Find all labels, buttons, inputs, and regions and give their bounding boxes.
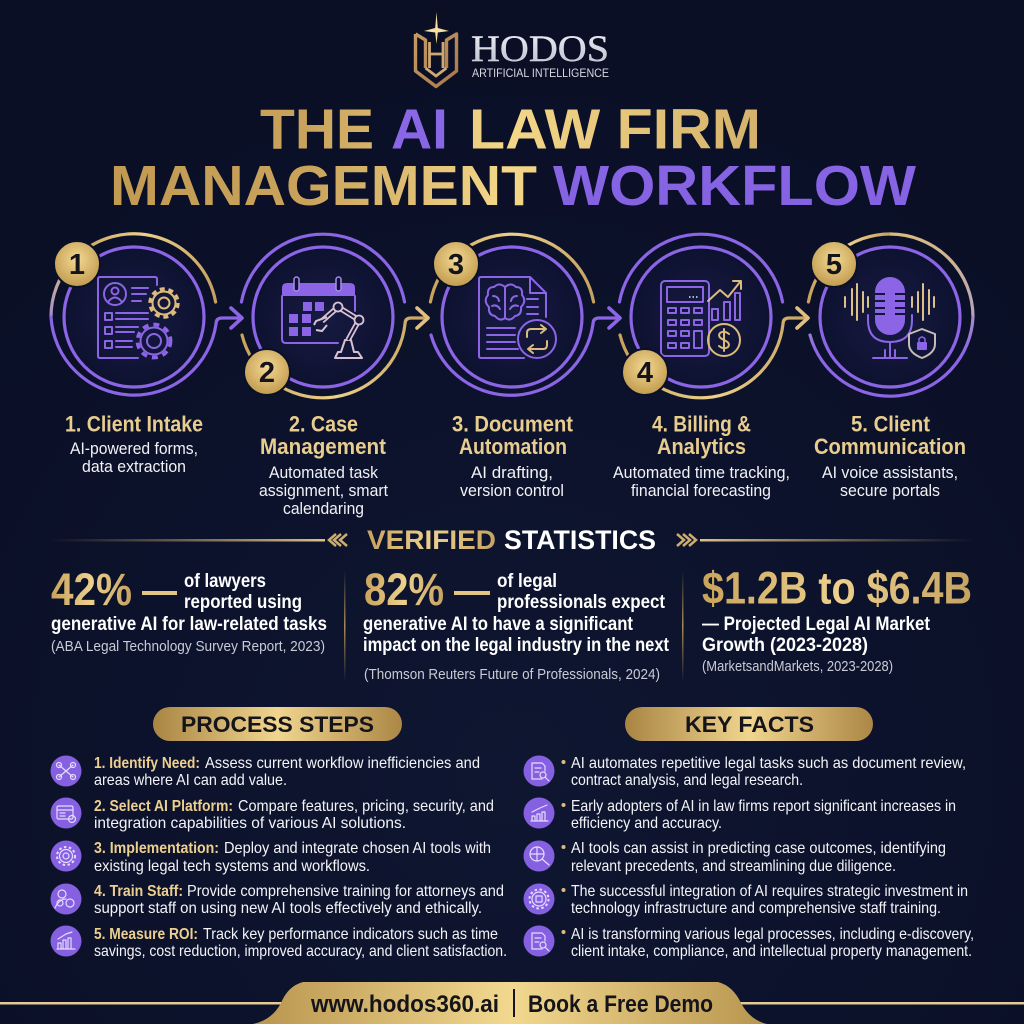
step 1: client intake — [51, 234, 242, 476]
step 3 text: 3. Document — [452, 412, 574, 436]
process step 2: Compare features, pricing, security, and — [238, 798, 494, 815]
stat: 42 percent: generative AI for law-related tasks — [51, 613, 327, 635]
key fact 4: The successful integration of AI requires strategic investment in — [571, 883, 968, 900]
stat: 42 percent: reported using — [184, 591, 302, 613]
step 5 text: AI voice assistants, — [822, 464, 958, 482]
icon: calendar with robot arm — [282, 277, 364, 358]
heading pill: key facts: KEY FACTS — [685, 712, 814, 737]
heading: verified statistics: VERIFIED — [367, 525, 496, 555]
stat: 82 percent: professionals expect — [497, 591, 665, 613]
step 2 text: Automated task — [269, 464, 379, 482]
panel: process steps list — [50, 755, 507, 960]
process step 1 — [50, 755, 480, 789]
brand tagline: ARTIFICIAL INTELLIGENCE — [472, 68, 609, 80]
process step 3: 3. Implementation: — [94, 840, 219, 857]
stat: 42 percent: (ABA Legal Technology Survey Report, 2023) — [51, 638, 325, 655]
process step 3: Deploy and integrate chosen AI tools with — [224, 840, 491, 857]
title: MANAGEMENT — [110, 154, 537, 218]
key fact 1: AI automates repetitive legal tasks such as document review, — [571, 755, 966, 772]
badge 5: 5 — [826, 249, 842, 281]
stat: 42 percent: 42% — [51, 564, 132, 615]
icon: shield with star — [416, 12, 456, 86]
key fact 3: AI tools can assist in predicting case outcomes, identifying — [571, 840, 946, 857]
step 3 text — [452, 412, 574, 500]
arrow — [609, 308, 620, 328]
badge 1 — [54, 241, 100, 287]
stat: 82 percent: 82% — [364, 564, 444, 615]
process step 5: savings, cost reduction, improved accuracy, and client satisfaction. — [94, 943, 507, 960]
process step 4: support staff on using new AI tools effectively and ethically. — [94, 900, 482, 917]
stat: 82 percent: of legal — [497, 570, 557, 592]
step 2 text: Management — [260, 434, 387, 459]
heading: verified statistics: STATISTICS — [504, 525, 656, 555]
step 3: document automation — [430, 234, 620, 500]
step 1 text: AI-powered forms, — [70, 440, 198, 458]
key fact 2: Early adopters of AI in law firms report significant increases in — [571, 798, 956, 815]
stat: market growth: $1.2B to $6.4B — [702, 562, 972, 614]
step 5: client communication — [808, 234, 973, 500]
stat: 82 percent: (Thomson Reuters Future of Professionals, 2024) — [364, 666, 660, 683]
process step 3: existing legal tech systems and workflows. — [94, 858, 370, 875]
badge 3: 3 — [448, 249, 464, 281]
step 5 text: 5. Client — [851, 412, 931, 436]
badge 4 — [622, 349, 668, 395]
step 4 text — [613, 412, 790, 500]
logo: Hodos Artificial Intelligence — [416, 12, 609, 86]
step 1 text — [65, 412, 203, 476]
badge 2 — [244, 349, 290, 395]
process step 2: 2. Select AI Platform: — [94, 798, 233, 815]
stat: 42 percent — [51, 564, 327, 655]
stat: market growth: (MarketsandMarkets, 2023-2028) — [702, 658, 893, 675]
heading: verified statistics — [50, 525, 974, 555]
icon: profile form with gears — [98, 277, 178, 358]
key fact 5: client intake, compliance, and intellectual property management. — [571, 943, 972, 960]
process step 2 — [50, 798, 494, 832]
title — [110, 98, 916, 218]
key fact 4: technology infrastructure and comprehensive staff training. — [571, 900, 941, 917]
footer call to action: Book a Free Demo — [528, 991, 713, 1018]
key fact 1 — [524, 755, 966, 789]
step 2 text: assignment, smart — [259, 482, 388, 500]
step 5 text: Communication — [814, 434, 966, 459]
step 2 text: calendaring — [283, 500, 364, 518]
step 4 text: financial forecasting — [631, 482, 771, 500]
step 3 text: Automation — [459, 434, 567, 459]
badge 5 — [811, 241, 857, 287]
step 2 text: 2. Case — [289, 412, 358, 436]
title: AI — [391, 98, 448, 162]
process step 1: areas where AI can add value. — [94, 772, 287, 789]
step 5 text: secure portals — [840, 482, 940, 500]
process step 5 — [50, 926, 507, 960]
title: THE — [260, 98, 374, 162]
process step 5: 5. Measure ROI: — [94, 926, 198, 943]
arrow — [797, 308, 808, 328]
badge 1: 1 — [69, 249, 85, 281]
key fact 2 — [524, 798, 956, 832]
stat: market growth: Growth (2023-2028) — [702, 634, 868, 656]
heading pill: process steps: PROCESS STEPS — [181, 712, 374, 737]
process step 5: Track key performance indicators such as time — [203, 926, 498, 943]
heading pill: process steps — [153, 707, 402, 741]
title: WORKFLOW — [553, 154, 916, 218]
process step 4: 4. Train Staff: — [94, 883, 183, 900]
step 3 text: version control — [460, 482, 564, 500]
heading pill: key facts — [625, 707, 873, 741]
stat: market growth — [702, 562, 972, 675]
step 4 text: Automated time tracking, — [613, 464, 790, 482]
badge 3 — [433, 241, 479, 287]
step 5 text — [814, 412, 966, 500]
icon: microphone with shield — [845, 277, 935, 358]
process step 4: Provide comprehensive training for attorneys and — [187, 883, 504, 900]
step 3 text: AI drafting, — [471, 464, 553, 482]
step 2 text — [259, 412, 388, 518]
step 1 text: data extraction — [82, 458, 186, 476]
process step 1: Assess current workflow inefficiencies and — [205, 755, 480, 772]
key fact 1: contract analysis, and legal research. — [571, 772, 803, 789]
footer banner — [0, 982, 1024, 1024]
stat: 42 percent: of lawyers — [184, 570, 266, 592]
arrow — [417, 308, 428, 328]
icon: calculator, chart and dollar — [661, 281, 741, 356]
stat: 82 percent: impact on the legal industry in the next — [363, 634, 669, 656]
key fact 5: AI is transforming various legal processes, including e-discovery, — [571, 926, 974, 943]
process step 3 — [50, 840, 491, 875]
key fact 5 — [524, 926, 974, 960]
step 4: billing and analytics — [613, 234, 808, 500]
badge 4: 4 — [637, 357, 653, 389]
stat: market growth: — Projected Legal AI Market — [702, 613, 930, 635]
key fact 2: efficiency and accuracy. — [571, 815, 722, 832]
step 4 text: Analytics — [657, 434, 746, 459]
badge 2: 2 — [259, 357, 275, 389]
stat: 82 percent: generative AI to have a significant — [363, 613, 633, 635]
step 2: case management — [241, 234, 428, 518]
step 4 text: 4. Billing & — [652, 412, 751, 436]
panel: key facts list — [524, 755, 974, 960]
brand name: HODOS — [471, 29, 609, 70]
key fact 3 — [524, 840, 946, 875]
stat: 82 percent — [363, 564, 669, 683]
arrow — [231, 308, 242, 328]
process step 2: integration capabilities of various AI solutions. — [94, 815, 406, 832]
key fact 4 — [524, 883, 968, 917]
icon: document with brain and sync — [479, 277, 556, 358]
footer website: www.hodos360.ai — [310, 991, 499, 1018]
process step 4 — [50, 883, 504, 917]
key fact 3: relevant precedents, and streamlining due diligence. — [571, 858, 896, 875]
process step 1: 1. Identify Need: — [94, 755, 200, 772]
title: LAW FIRM — [469, 98, 761, 162]
step 1 text: 1. Client Intake — [65, 412, 203, 436]
